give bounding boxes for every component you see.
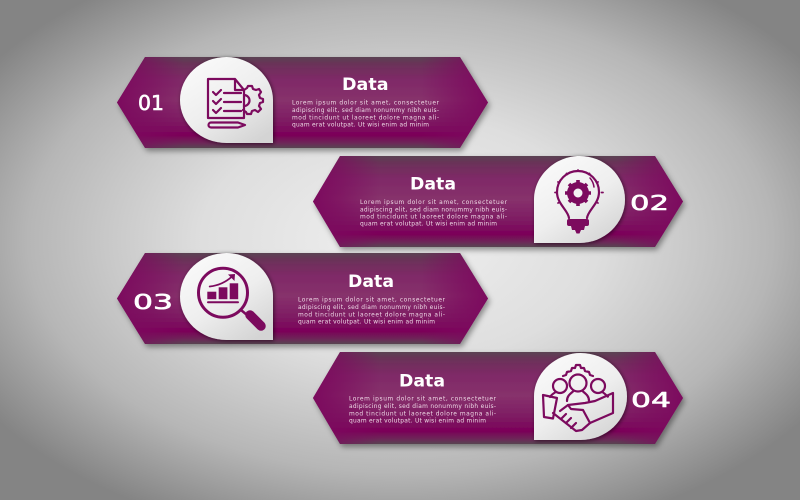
text block: step 01: mod tincidunt ut laoreet dolore magna ali-	[292, 115, 439, 121]
text block: step 01: adipiscing elit, sed diam nonummy nibh euis-	[292, 108, 439, 114]
text block: step 04: Lorem ipsum dolor sit amet, consectetuer	[349, 397, 497, 403]
text block: step 01	[292, 101, 440, 129]
panel: step 02	[313, 156, 683, 247]
text block: step 04: quam erat volutpat. Ut wisi enim ad minim	[349, 419, 486, 425]
text block: step 01: quam erat volutpat. Ut wisi enim ad minim	[292, 123, 429, 129]
text block: step 03: quam erat volutpat. Ut wisi enim ad minim	[298, 319, 435, 325]
number: 01: 01	[138, 91, 164, 115]
badge: step 02	[534, 156, 625, 243]
panel: step 03	[117, 253, 488, 344]
text block: step 04: mod tincidunt ut laoreet dolore magna ali-	[349, 411, 496, 417]
text block: step 02: quam erat volutpat. Ut wisi enim ad minim	[360, 222, 497, 228]
number: 03: 03	[133, 290, 173, 314]
text block: step 04: adipiscing elit, sed diam nonummy nibh euis-	[349, 404, 496, 410]
text block: step 02: mod tincidunt ut laoreet dolore magna ali-	[360, 214, 507, 220]
text block: step 01: Lorem ipsum dolor sit amet, consectetuer	[292, 101, 440, 107]
number: 04: 04	[631, 388, 671, 412]
heading: step 04: Data	[399, 371, 445, 391]
text block: step 02: adipiscing elit, sed diam nonummy nibh euis-	[360, 207, 507, 213]
icon: checklist and gear	[208, 79, 263, 128]
badge: step 04	[534, 353, 627, 440]
panel: step 01	[117, 57, 488, 148]
badge: step 03	[180, 253, 273, 340]
text block: step 03: adipiscing elit, sed diam nonummy nibh euis-	[298, 305, 445, 311]
badge: step 01	[180, 57, 273, 143]
text block: step 02: Lorem ipsum dolor sit amet, consectetuer	[360, 200, 508, 206]
text block: step 03: mod tincidunt ut laoreet dolore magna ali-	[298, 312, 445, 318]
panel: step 04	[313, 352, 683, 444]
number: 02: 02	[630, 191, 669, 215]
text block: step 03	[298, 298, 446, 325]
heading: step 01: Data	[342, 75, 388, 95]
heading: step 03: Data	[348, 272, 394, 292]
text block: step 04	[349, 397, 497, 425]
icon: light bulb with gear	[555, 170, 603, 234]
text block: step 03: Lorem ipsum dolor sit amet, consectetuer	[298, 298, 446, 304]
heading: step 02: Data	[410, 174, 456, 194]
icon: magnifier with bar chart	[198, 268, 261, 326]
icon: team and handshake	[543, 365, 613, 431]
text block: step 02	[360, 200, 508, 228]
